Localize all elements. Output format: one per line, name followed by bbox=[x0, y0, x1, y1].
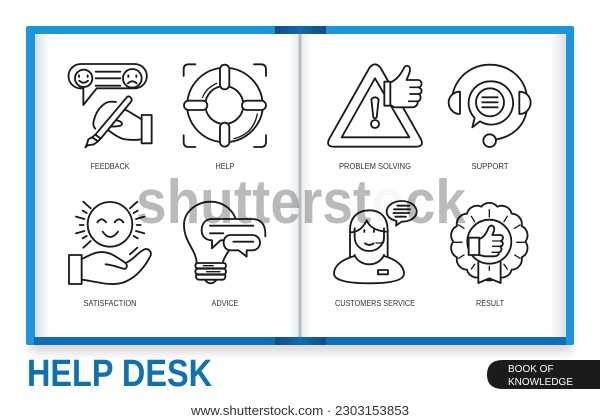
right page bbox=[300, 34, 566, 337]
icon: advice bbox=[184, 202, 265, 283]
icon: support bbox=[449, 65, 531, 147]
label: satisfaction: SATISFACTION bbox=[84, 299, 137, 308]
badge: book of knowledge bbox=[487, 360, 600, 389]
icon: satisfaction bbox=[69, 202, 151, 284]
label: feedback: FEEDBACK bbox=[90, 162, 130, 171]
badge: book of knowledge: KNOWLEDGE bbox=[508, 377, 573, 388]
icon: help bbox=[184, 64, 266, 147]
label: help: HELP bbox=[216, 162, 234, 171]
label: result: RESULT bbox=[476, 299, 504, 308]
left page bbox=[35, 34, 300, 337]
icon: problem solving bbox=[328, 64, 422, 147]
title: HELP DESK bbox=[27, 353, 212, 395]
icons layer bbox=[69, 64, 531, 284]
book cover bbox=[26, 26, 574, 345]
label: problem solving: PROBLEM SOLVING bbox=[339, 162, 411, 171]
book spine bbox=[275, 26, 326, 345]
icon: customers service bbox=[334, 201, 417, 283]
label: customers service: CUSTOMERS SERVICE bbox=[335, 299, 415, 308]
badge: book of knowledge: BOOK OF bbox=[508, 364, 554, 375]
footer url: www.shutterstock.com · 2303153853 bbox=[190, 404, 409, 418]
watermark: shutterstock bbox=[136, 168, 466, 237]
icon: result bbox=[451, 203, 527, 283]
label: support: SUPPORT bbox=[472, 162, 509, 171]
icon: feedback bbox=[69, 64, 152, 147]
label: advice: ADVICE bbox=[212, 299, 238, 308]
book bbox=[26, 26, 574, 352]
